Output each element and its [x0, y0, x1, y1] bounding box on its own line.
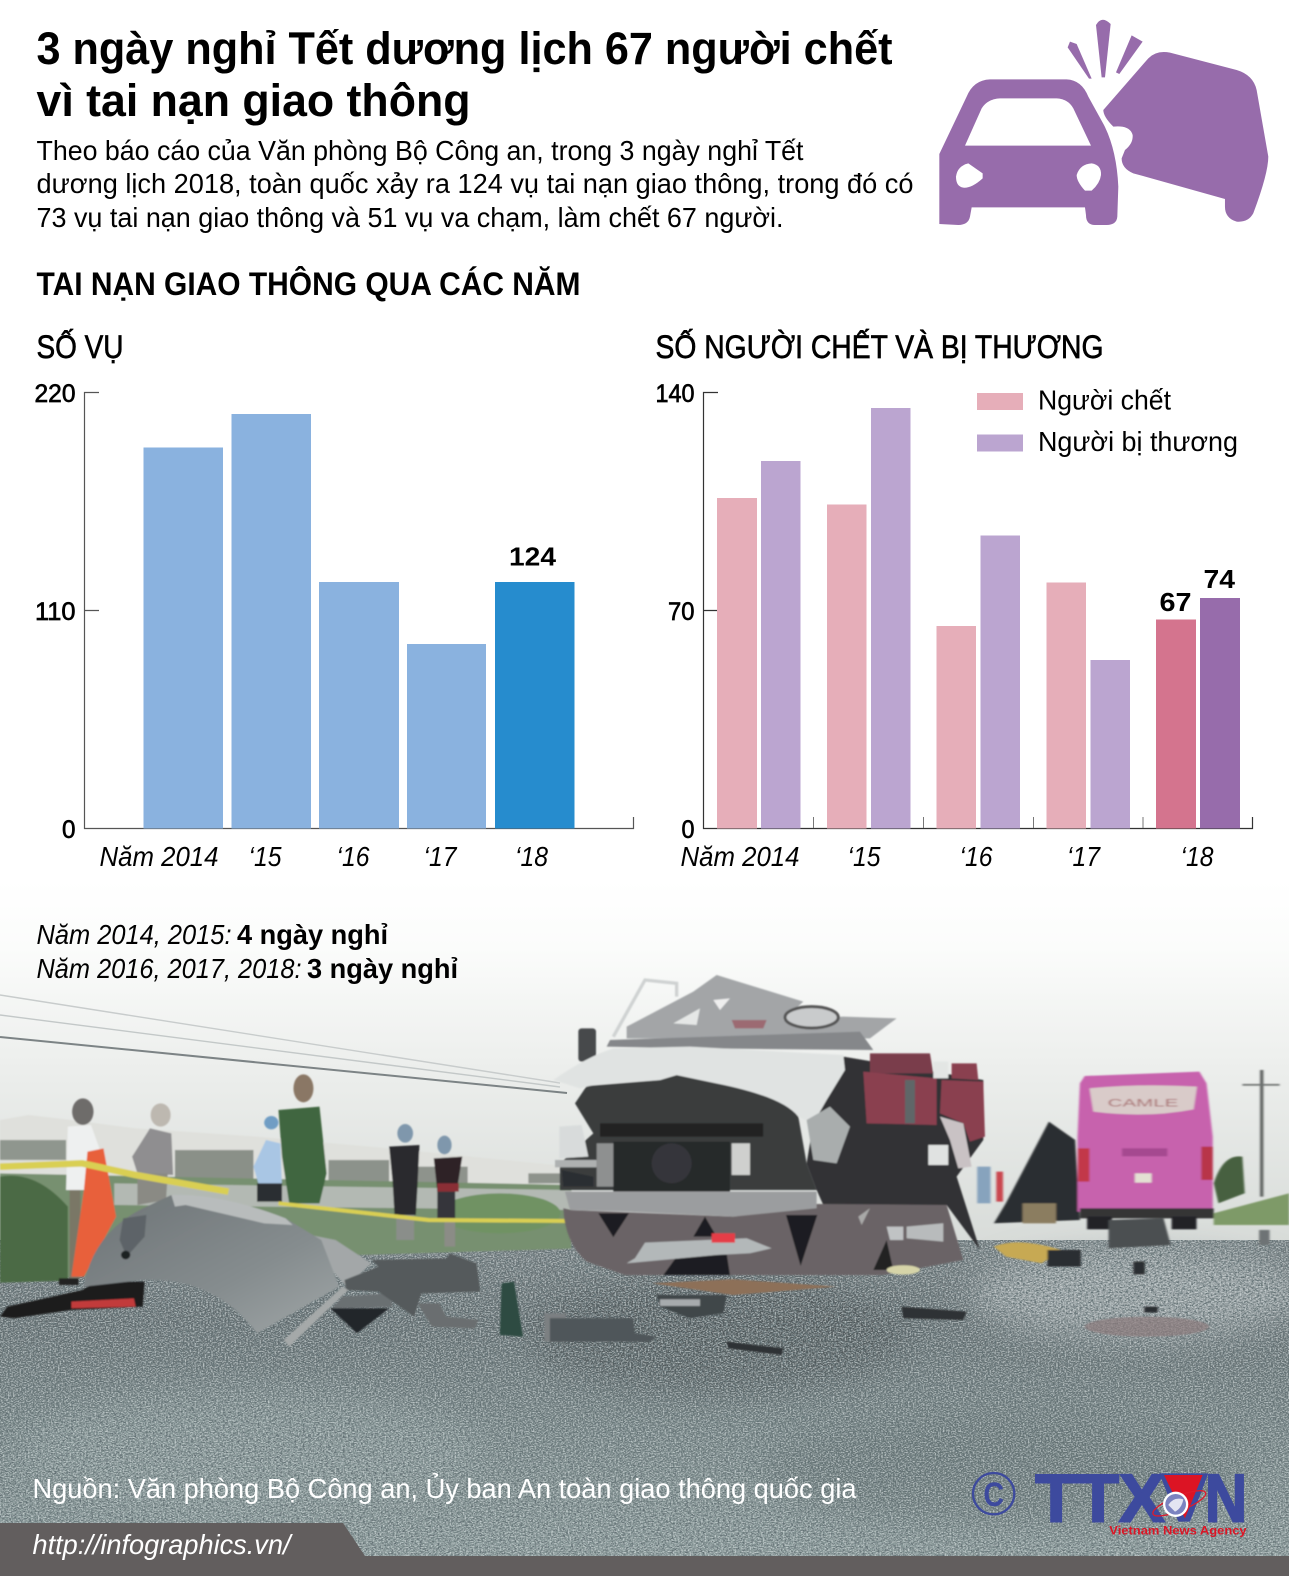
- y axis labels: 0: [682, 816, 694, 844]
- grass and wall: [0, 1173, 571, 1283]
- axes: [704, 392, 1252, 828]
- left side: people, building, bumper: [0, 1074, 571, 1347]
- person in white: [59, 1098, 100, 1285]
- mirror: [578, 1028, 596, 1062]
- person in blue shirt: [253, 1116, 282, 1202]
- intro paragraph: [36, 135, 914, 233]
- plate: [627, 1238, 772, 1263]
- legend: Người chết: [1038, 384, 1171, 416]
- logo: TTXVN: [973, 1461, 1247, 1537]
- bar chart: deaths and injuries per year: [656, 380, 1252, 872]
- y axis labels: [34, 380, 76, 844]
- distant trees and pole: [1214, 1070, 1289, 1225]
- icon: car collision: [939, 20, 1268, 225]
- black notches: [598, 1213, 817, 1275]
- lower van body: [563, 1204, 963, 1275]
- power lines: [0, 995, 567, 1093]
- agency name: Vietnam News Agency: [1109, 1523, 1247, 1537]
- man in red and black: [434, 1136, 462, 1247]
- red seats: [863, 1053, 985, 1168]
- y axis labels: 220: [34, 380, 76, 408]
- note: holiday lengths: Năm 2014, 2015:: [36, 919, 232, 950]
- wreck side dark mass: [807, 1057, 983, 1250]
- grey crate: [544, 1313, 566, 1342]
- intro paragraph: 73 vụ tai nạn giao thông và 51 vụ va chạm, làm chết 67 người.: [36, 202, 784, 233]
- note: holiday lengths: [36, 919, 458, 984]
- x axis labels: ‘15: [848, 841, 881, 872]
- man in black: [389, 1124, 419, 1240]
- globe: [1150, 1486, 1208, 1521]
- door frame: [613, 980, 677, 1037]
- source line: Nguồn: Văn phòng Bộ Công an, Ủy ban An toàn giao thông quốc gia: [32, 1472, 857, 1504]
- title: [36, 23, 893, 126]
- injuries bars: [761, 408, 1130, 828]
- x axis labels: ‘15: [248, 841, 282, 872]
- torn roof: [607, 975, 897, 1050]
- green debris: [500, 1282, 523, 1337]
- title: 3 ngày nghỉ Tết dương lịch 67 người chết: [36, 23, 893, 74]
- section heading: TAI NẠN GIAO THÔNG QUA CÁC NĂM: [36, 266, 580, 302]
- y axis labels: 0: [62, 816, 76, 844]
- deaths bars: [717, 498, 1086, 828]
- police tape: [0, 1163, 571, 1221]
- wrecked dark vehicle behind: [994, 1122, 1080, 1223]
- factory building: [0, 1115, 571, 1190]
- debris under bus: [1109, 1218, 1171, 1248]
- wordmark: N: [1205, 1461, 1247, 1536]
- x axis labels: ‘18: [1180, 841, 1214, 872]
- road surface: [0, 1240, 1289, 1560]
- pink bus: CAMLE: [1108, 1097, 1179, 1109]
- bar 2018 highlight: [495, 582, 574, 828]
- x axis labels: Năm 2014: [100, 841, 218, 872]
- bumper band: [565, 1192, 817, 1217]
- copyright mark: C: [983, 1476, 1004, 1514]
- intro paragraph: dương lịch 2018, toàn quốc xảy ra 124 vụ tai nạn giao thông, trong đó có: [36, 168, 914, 199]
- crumple: [807, 1107, 850, 1163]
- x axis labels: Năm 2014: [680, 841, 800, 872]
- road debris: [1047, 1230, 1270, 1313]
- legend: Người bị thương: [1038, 426, 1238, 457]
- background photo: crash scene: [0, 880, 1289, 1560]
- broken car bumper: [0, 1195, 480, 1347]
- note: holiday lengths: 3 ngày nghỉ: [307, 953, 458, 984]
- legend: [977, 384, 1238, 457]
- chart heading: deaths and injuries: SỐ NGƯỜI CHẾT VÀ BỊ THƯƠNG: [656, 329, 1104, 365]
- fruit pile: [994, 1242, 1061, 1263]
- x axis labels: [680, 841, 1214, 872]
- reddish road stain: [1085, 1317, 1209, 1337]
- bars 2018 highlight: [1156, 620, 1196, 828]
- inner debris: [858, 1208, 943, 1275]
- wordmark: TTX: [1035, 1461, 1165, 1536]
- value label: 124: [509, 542, 557, 572]
- white hood: [553, 1047, 845, 1123]
- y axis labels: 110: [35, 598, 76, 626]
- x axis labels: ‘18: [515, 841, 548, 872]
- bar chart: accidents per year: [34, 380, 634, 872]
- intro paragraph: Theo báo cáo của Văn phòng Bộ Công an, trong 3 ngày nghỉ Tết: [36, 135, 804, 166]
- wooden board: [652, 1279, 837, 1295]
- value label 74: 74: [1204, 564, 1236, 594]
- pink bus: [1078, 1072, 1214, 1229]
- traffic cone: [71, 1148, 116, 1277]
- y axis labels: 140: [656, 380, 694, 408]
- person in grey shirt: [132, 1103, 173, 1205]
- copyright mark: [973, 1473, 1014, 1514]
- title: vì tai nạn giao thông: [36, 75, 470, 126]
- headlight: [559, 1125, 588, 1158]
- bars 2014-2017: [144, 414, 486, 828]
- right of scene: distant wreck and pink bus: [977, 1070, 1289, 1337]
- cross bar: [600, 1123, 763, 1137]
- radiator: [613, 1142, 730, 1192]
- roadside figures: [977, 1167, 1056, 1223]
- note: holiday lengths: Năm 2016, 2017, 2018:: [36, 953, 302, 984]
- wordmark: [1035, 1461, 1247, 1536]
- note: holiday lengths: 4 ngày nghỉ: [237, 919, 388, 950]
- wrecked van: [550, 975, 985, 1355]
- x axis labels: ‘16: [960, 841, 993, 872]
- police officer: [278, 1074, 327, 1203]
- axes: [84, 392, 634, 828]
- x axis labels: [100, 841, 548, 872]
- url: http://infographics.vn/: [32, 1529, 294, 1560]
- y axis labels: 70: [668, 598, 694, 626]
- dark front of van: [560, 1075, 817, 1190]
- x axis labels: ‘17: [1067, 841, 1101, 872]
- y axis labels: [656, 380, 694, 844]
- footer band with url tab: [0, 1523, 1289, 1576]
- value label 67: 67: [1160, 587, 1192, 617]
- chart heading: accidents: SỐ VỤ: [36, 329, 124, 365]
- x axis labels: ‘17: [424, 841, 458, 872]
- x axis labels: ‘16: [336, 841, 370, 872]
- shadow and road debris: [550, 1295, 967, 1355]
